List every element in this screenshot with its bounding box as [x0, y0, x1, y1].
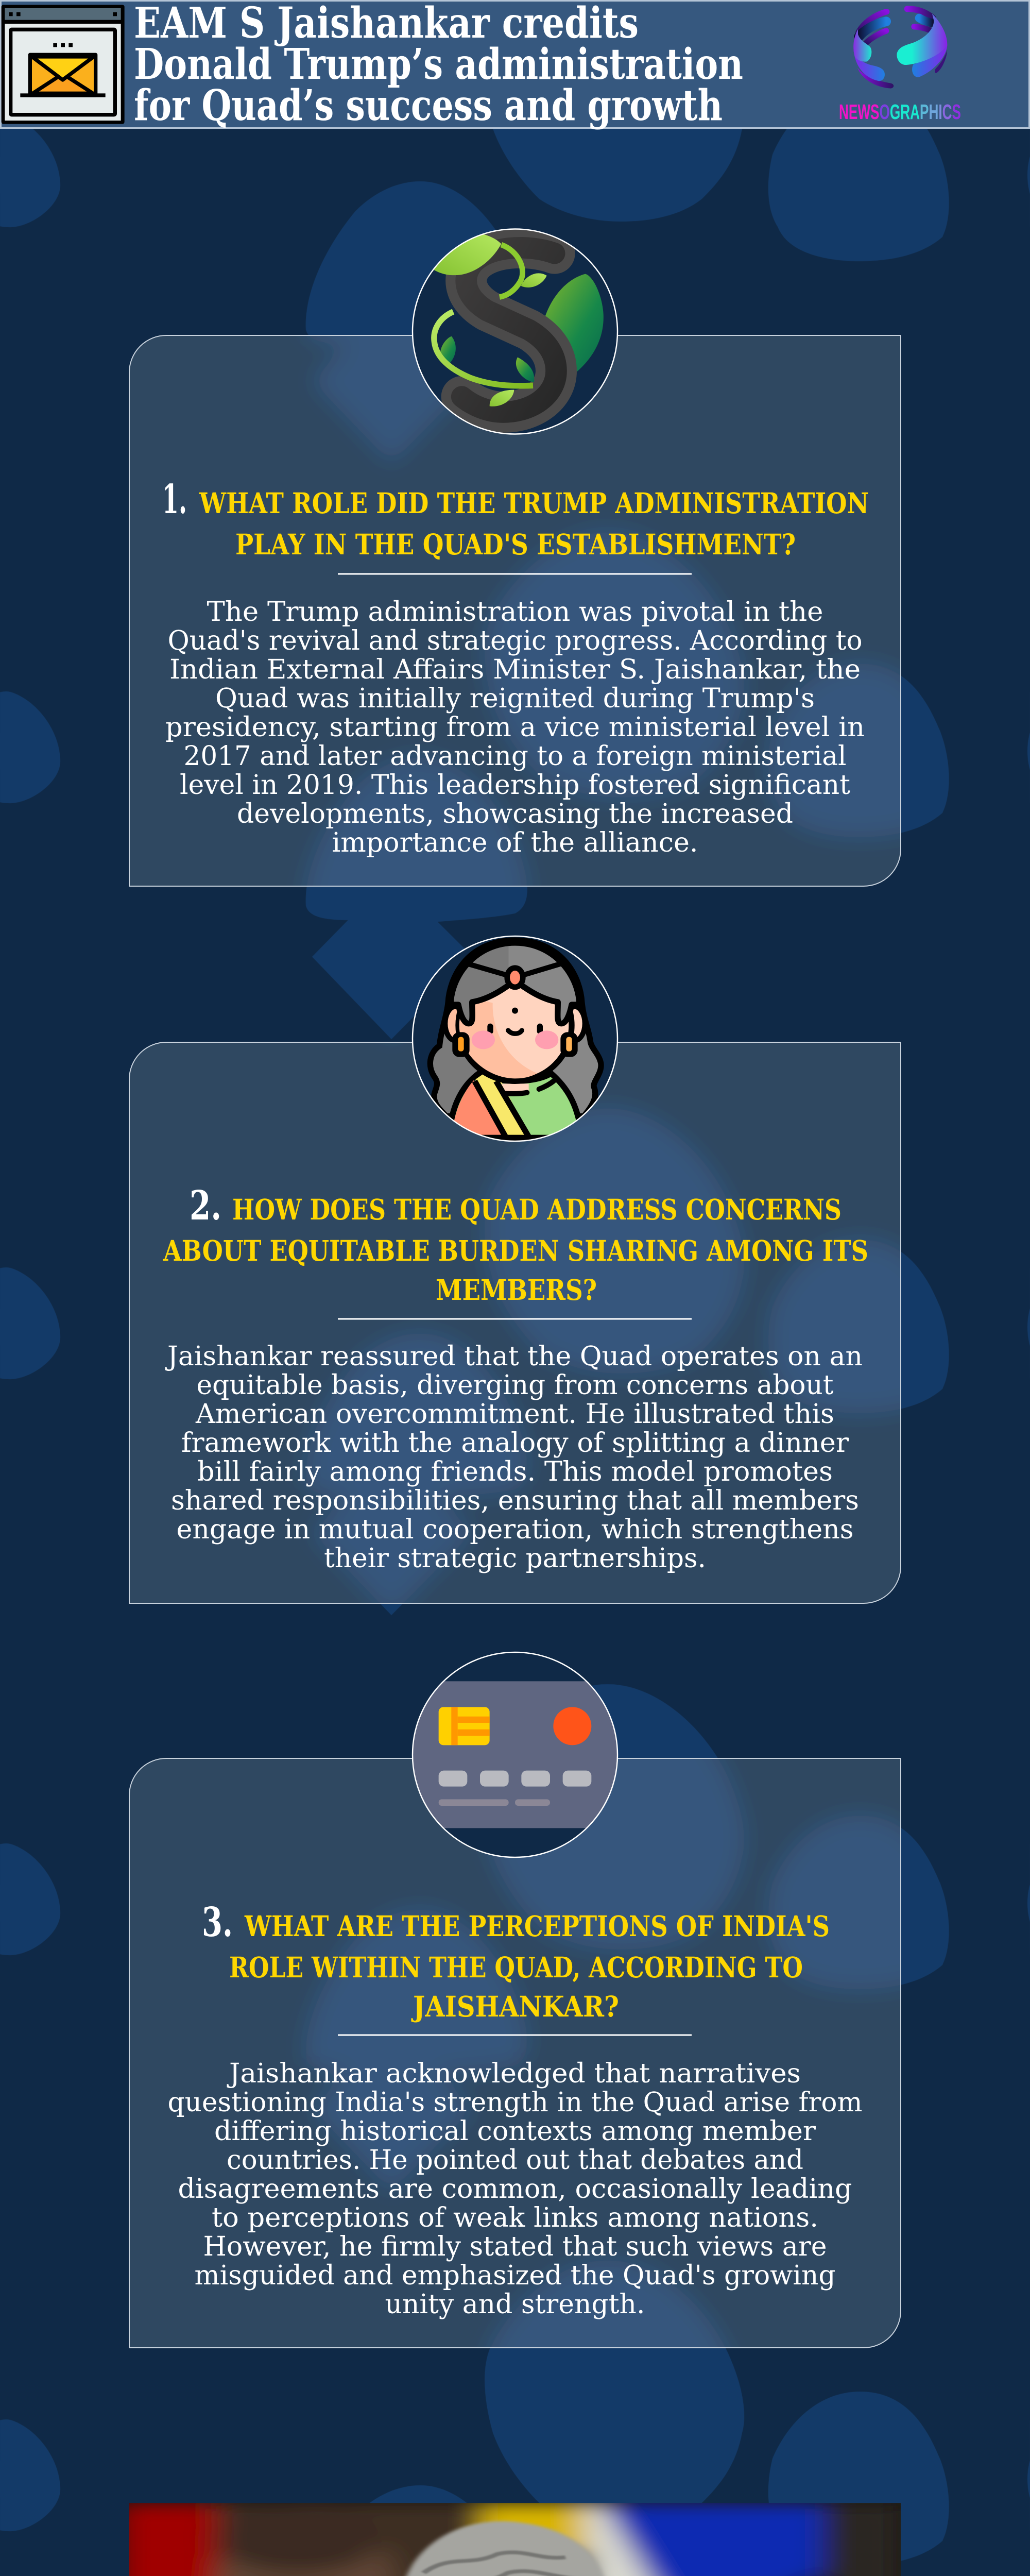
title	[134, 0, 743, 130]
text block: to perceptions of weak links among nations.	[212, 2202, 818, 2233]
text block: importance of the alliance.	[332, 827, 698, 858]
heading: ABOUT EQUITABLE BURDEN SHARING AMONG ITS	[163, 1234, 868, 1267]
text block: questioning India's strength in the Quad arise from	[168, 2087, 862, 2118]
text block: countries. He pointed out that debates and	[227, 2145, 803, 2176]
heading: ROLE WITHIN THE QUAD, ACCORDING TO	[229, 1951, 803, 1984]
logo: Newsographics header	[839, 9, 961, 124]
text block: American overcommitment. He illustrated this	[195, 1399, 834, 1430]
text block: disagreements are common, occasionally leading	[178, 2174, 852, 2205]
heading: 3.	[202, 1899, 233, 1946]
logo: Newsographics header: NEWSOGRAPHICS	[839, 100, 961, 124]
heading: 1.	[162, 476, 187, 523]
text block	[165, 1341, 863, 1574]
text block: differing historical contexts among member	[214, 2116, 816, 2147]
heading: MEMBERS?	[436, 1273, 597, 1307]
text block: 2017 and later advancing to a foreign ministerial	[183, 741, 847, 772]
title: Donald Trump’s administration	[134, 40, 743, 89]
hair	[398, 2521, 608, 2576]
heading	[162, 476, 869, 561]
heading: PLAY IN THE QUAD'S ESTABLISHMENT?	[235, 528, 796, 561]
text block: developments, showcasing the increased	[237, 799, 793, 829]
text block	[168, 2058, 862, 2320]
text block: bill fairly among friends. This model promotes	[197, 1456, 833, 1487]
icon: credit card	[408, 1652, 622, 1857]
text block: However, he firmly stated that such views are	[203, 2231, 827, 2262]
text block: Indian External Affairs Minister S. Jaishankar, the	[169, 654, 861, 685]
text block: unity and strength.	[385, 2289, 645, 2320]
icon: mail browser window	[2, 5, 125, 124]
text block: presidency, starting from a vice ministerial level in	[165, 712, 865, 743]
heading: WHAT ARE THE PERCEPTIONS OF INDIA'S	[244, 1909, 830, 1943]
title: for Quad’s success and growth	[134, 81, 723, 130]
text block: Jaishankar acknowledged that narratives	[227, 2058, 801, 2089]
text block: Quad was initially reignited during Trump's	[215, 683, 815, 714]
panel: question 1	[129, 228, 901, 887]
text block: equitable basis, diverging from concerns about	[197, 1370, 834, 1401]
heading	[202, 1899, 830, 2023]
text block: Jaishankar reassured that the Quad operates on an	[165, 1341, 863, 1372]
photo: S. Jaishankar at microphone	[119, 2503, 901, 2576]
text block: engage in mutual cooperation, which strengthens	[176, 1514, 854, 1545]
text block: their strategic partnerships.	[324, 1543, 706, 1574]
text block: The Trump administration was pivotal in the	[207, 597, 823, 628]
text block: misguided and emphasized the Quad's growing	[195, 2260, 835, 2291]
heading: HOW DOES THE QUAD ADDRESS CONCERNS	[232, 1193, 842, 1226]
text block	[165, 597, 865, 858]
heading	[163, 1182, 868, 1307]
text block: framework with the analogy of splitting a dinner	[181, 1428, 849, 1459]
icon: Indian woman	[413, 936, 617, 1142]
heading: 2.	[190, 1182, 221, 1229]
heading: WHAT ROLE DID THE TRUMP ADMINISTRATION	[199, 486, 869, 520]
heading: JAISHANKAR?	[411, 1990, 619, 2023]
panel: question 2	[129, 936, 901, 1604]
text block: level in 2019. This leadership fostered significant	[180, 770, 850, 801]
panel: question 3	[129, 1652, 901, 2348]
text block: shared responsibilities, ensuring that all members	[171, 1485, 859, 1516]
header banner	[1, 0, 1029, 130]
icon: letter S with vine	[413, 229, 617, 434]
text block: Quad's revival and strategic progress. According to	[168, 625, 862, 656]
